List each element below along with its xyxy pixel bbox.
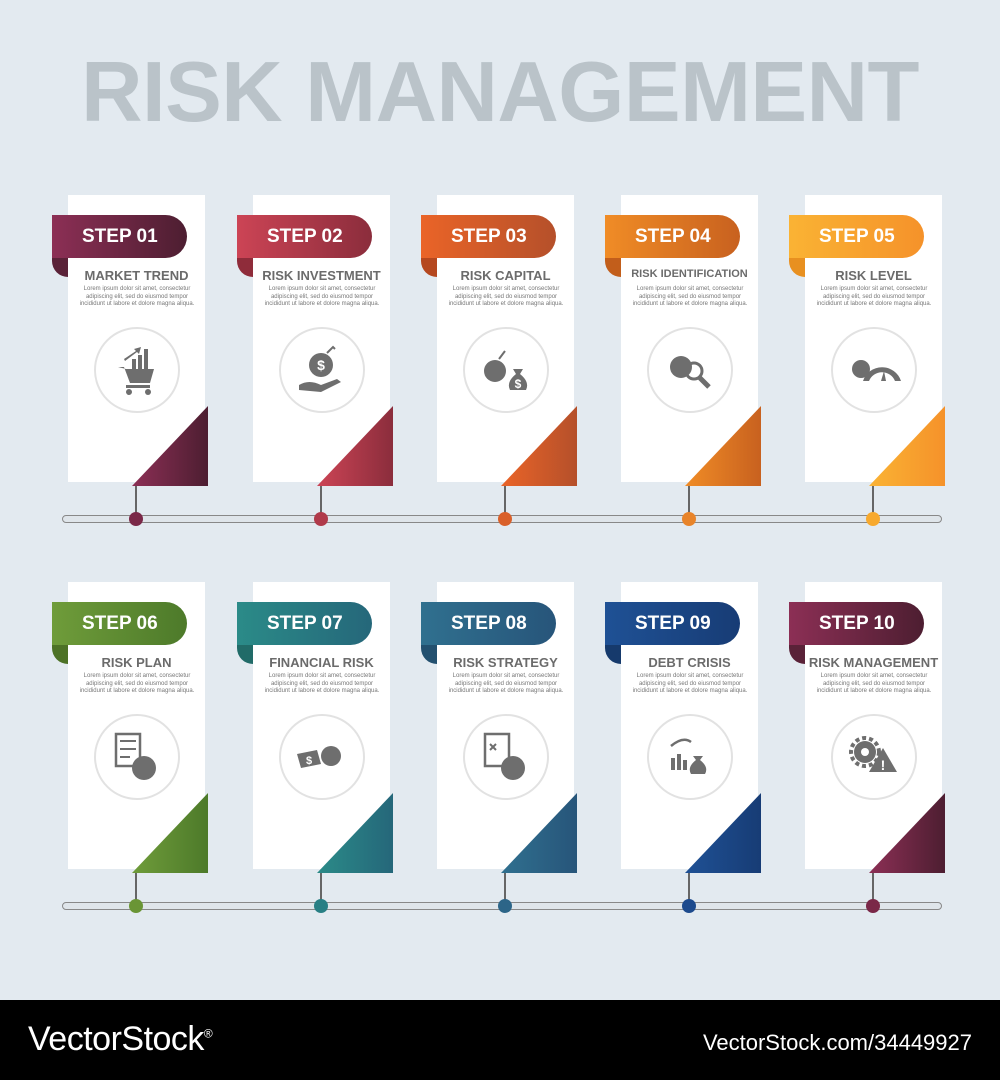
heading: RISK IDENTIFICATION [631,268,748,280]
dot [682,512,696,526]
text: Lorem ipsum dolor sit amet, consectetur adipiscing elit, sed do eiusmod tempor incididunt ut labore et dolore magna aliqua. [80,286,194,307]
icon: bomb and money bag [463,327,549,413]
ribbon: step 03 [421,215,556,258]
ribbon: step 05: STEP 05 [819,226,895,247]
text: Lorem ipsum dolor sit amet, consectetur adipiscing elit, sed do eiusmod tempor incididunt ut labore et dolore magna aliqua. [265,673,379,694]
card: step 06 [52,582,208,913]
ribbon: step 02 [237,215,372,258]
ribbon: step 05 [789,215,924,258]
card: step 10 [789,582,945,913]
text: Lorem ipsum dolor sit amet, consectetur adipiscing elit, sed do eiusmod tempor incididunt ut labore et dolore magna aliqua. [817,673,931,694]
card: step 02 [237,195,393,526]
ribbon: step 01 [52,215,187,258]
heading: RISK CAPITAL [460,268,551,283]
heading: RISK PLAN [101,655,172,670]
icon: cash bomb: $ [306,755,312,767]
icon: bomb and money bag: $ [515,377,522,391]
ribbon: step 10 [789,602,924,645]
ribbon: step 02: STEP 02 [267,226,343,247]
title: RISK MANAGEMENT [81,45,919,140]
ribbon: step 06: STEP 06 [82,613,158,634]
dot [129,899,143,913]
icon: money bomb hand: $ [317,357,325,373]
text: Lorem ipsum dolor sit amet, consectetur adipiscing elit, sed do eiusmod tempor incididunt ut labore et dolore magna aliqua. [633,286,747,307]
ribbon: step 09 [605,602,740,645]
card: step 01 [52,195,208,526]
heading: RISK STRATEGY [453,655,558,670]
heading: DEBT CRISIS [648,655,731,670]
dot [682,899,696,913]
heading: RISK MANAGEMENT [809,655,938,670]
icon: falling chart money bag [647,714,733,800]
text: Lorem ipsum dolor sit amet, consectetur adipiscing elit, sed do eiusmod tempor incididunt ut labore et dolore magna aliqua. [80,673,194,694]
footer [0,1000,1000,1080]
ribbon: step 10: STEP 10 [819,613,895,634]
text: Lorem ipsum dolor sit amet, consectetur adipiscing elit, sed do eiusmod tempor incididunt ut labore et dolore magna aliqua. [817,286,931,307]
dot [866,899,880,913]
heading: MARKET TREND [84,268,188,283]
text: Lorem ipsum dolor sit amet, consectetur adipiscing elit, sed do eiusmod tempor incididunt ut labore et dolore magna aliqua. [265,286,379,307]
ribbon: step 08: STEP 08 [451,613,527,634]
icon: cash bomb [279,714,365,800]
ribbon: step 07 [237,602,372,645]
dot [498,512,512,526]
dot [498,899,512,913]
heading: RISK LEVEL [835,268,912,283]
footer logo: VectorStock® [28,1020,212,1058]
card: step 04 [605,195,761,526]
timeline bar row 1 [62,515,942,523]
ribbon: step 07: STEP 07 [267,613,343,634]
icon: gear warning [831,714,917,800]
icon: strategy board bomb [463,714,549,800]
card: step 07 [237,582,393,913]
icon: gear warning: ! [881,757,885,773]
ribbon: step 03: STEP 03 [451,226,527,247]
ribbon: step 04 [605,215,740,258]
text: Lorem ipsum dolor sit amet, consectetur adipiscing elit, sed do eiusmod tempor incididunt ut labore et dolore magna aliqua. [449,286,563,307]
dot [314,899,328,913]
ribbon: step 04: STEP 04 [635,226,711,247]
icon: plan bomb [94,714,180,800]
footer url: VectorStock.com/34449927 [703,1030,972,1055]
dot [866,512,880,526]
card: step 08 [421,582,577,913]
icon: cart with chart [94,327,180,413]
ribbon: step 06 [52,602,187,645]
text: Lorem ipsum dolor sit amet, consectetur adipiscing elit, sed do eiusmod tempor incididunt ut labore et dolore magna aliqua. [449,673,563,694]
dot [129,512,143,526]
icon: bomb gauge [831,327,917,413]
dot [314,512,328,526]
ribbon: step 01: STEP 01 [82,226,158,247]
card: step 03 [421,195,577,526]
ribbon: step 08 [421,602,556,645]
heading: RISK INVESTMENT [262,268,381,283]
text: Lorem ipsum dolor sit amet, consectetur adipiscing elit, sed do eiusmod tempor incididunt ut labore et dolore magna aliqua. [633,673,747,694]
icon: bomb magnifier [647,327,733,413]
timeline bar row 2 [62,902,942,910]
card: step 05 [789,195,945,526]
card: step 09 [605,582,761,913]
ribbon: step 09: STEP 09 [635,613,711,634]
heading: FINANCIAL RISK [269,655,374,670]
icon: money bomb hand [279,327,365,413]
